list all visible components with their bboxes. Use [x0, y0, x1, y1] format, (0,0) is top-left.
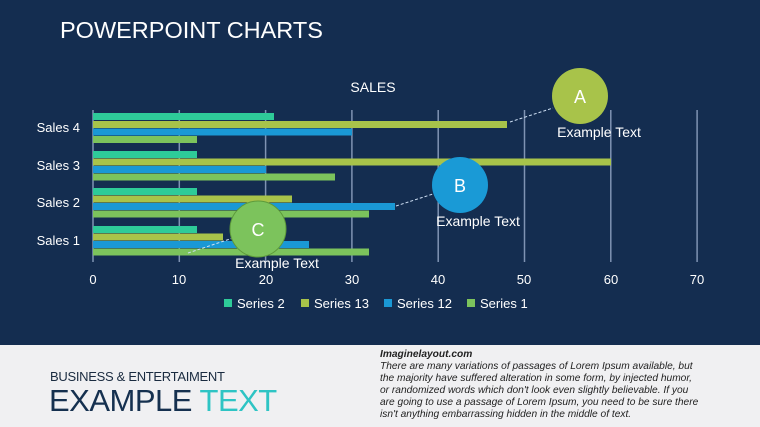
- x axis labels: 30: [345, 272, 359, 287]
- x axis labels: [89, 272, 704, 287]
- legend: [224, 296, 528, 311]
- footer body text: the majority have suffered alteration in some form, by injected humor,: [380, 373, 692, 384]
- chart title: SALES: [350, 79, 396, 95]
- callout A: Example Text: [557, 124, 641, 140]
- footer body text: or randomized words which don't look even slightly believable. If you: [380, 385, 688, 396]
- x axis labels: 70: [690, 272, 704, 287]
- y axis labels: [37, 120, 80, 248]
- footer heading: EXAMPLE TEXT: [49, 383, 277, 418]
- legend: Series 1: [480, 296, 528, 311]
- footer body text: [380, 349, 698, 420]
- footer body text: Imaginelayout.com: [380, 349, 472, 360]
- x axis labels: 0: [89, 272, 97, 287]
- y axis labels: Sales 2: [37, 195, 80, 210]
- title: POWERPOINT CHARTS: [60, 17, 323, 43]
- x axis labels: 10: [172, 272, 186, 287]
- footer body text: are going to use a passage of Lorem Ipsum, you need to be sure there: [380, 397, 698, 408]
- y axis labels: Sales 4: [37, 120, 80, 135]
- y axis labels: Sales 3: [37, 158, 80, 173]
- callout C: C: [252, 220, 264, 240]
- footer body text: isn't anything embarrassing hidden in the middle of text.: [380, 409, 631, 420]
- callout B: Example Text: [436, 213, 520, 229]
- footer body text: There are many variations of passages of Lorem Ipsum available, but: [380, 361, 693, 372]
- legend: Series 12: [397, 296, 452, 311]
- x axis labels: 20: [259, 272, 273, 287]
- legend: Series 13: [314, 296, 369, 311]
- callout A: [510, 68, 641, 140]
- footer panel: [0, 345, 760, 427]
- x axis labels: 50: [517, 272, 531, 287]
- y axis labels: Sales 1: [37, 233, 80, 248]
- x axis labels: 60: [604, 272, 618, 287]
- x axis labels: 40: [431, 272, 445, 287]
- callout C: [188, 201, 319, 271]
- legend: Series 2: [237, 296, 285, 311]
- bar chart: [93, 113, 611, 256]
- callout B: B: [454, 176, 466, 196]
- callout A: A: [574, 87, 586, 107]
- callout C: Example Text: [235, 255, 319, 271]
- callout B: [396, 157, 520, 229]
- footer subtitle: BUSINESS & ENTERTAIMENT: [50, 369, 225, 384]
